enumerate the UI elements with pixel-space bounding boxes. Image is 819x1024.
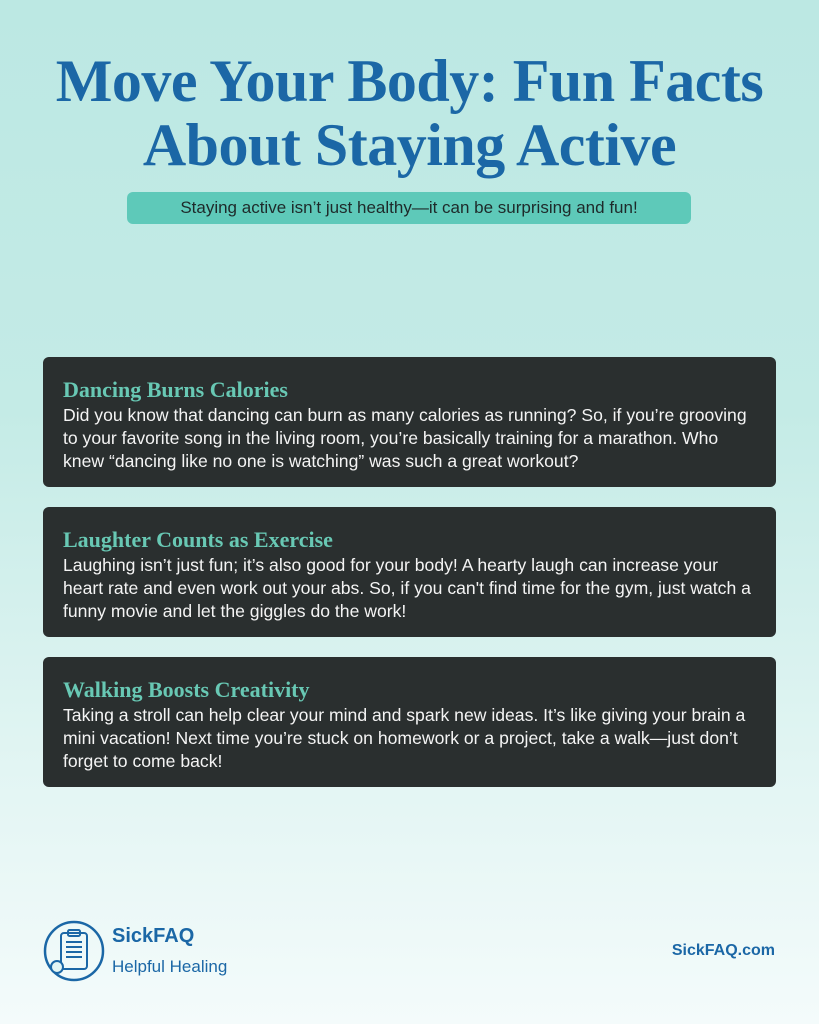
website: SickFAQ.com [672,942,775,959]
title: About Staying Active [143,112,676,178]
brand name: SickFAQ [112,925,194,947]
text: laughter [63,555,751,621]
text: walking [63,705,746,771]
text: laughter: Laughing isn’t just fun; it’s also good for your body! A hearty laugh can increase your [63,555,718,575]
title [56,48,763,178]
text: dancing: to your favorite song in the living room, you’re basically training for a marathon. Who [63,428,718,448]
text: laughter: heart rate and even work out your abs. So, if you can't find time for the gym, just watch a [63,578,751,598]
text: dancing [63,405,747,471]
title: Move Your Body: Fun Facts [56,48,763,114]
text: laughter: funny movie and let the giggles do the work! [63,601,406,621]
heading: dancing: Dancing Burns Calories [63,377,288,402]
panel: walking [43,657,776,787]
subtitle pill [127,192,691,224]
text: walking: mini vacation! Next time you’re stuck on homework or a project, take a walk—just don’t [63,728,738,748]
tagline: Helpful Healing [112,957,227,976]
logo [44,920,227,982]
icon: clipboard [44,920,104,982]
heading: laughter: Laughter Counts as Exercise [63,527,333,552]
text: dancing: knew “dancing like no one is watching” was such a great workout? [63,451,578,471]
subtitle pill: Staying active isn’t just healthy—it can be surprising and fun! [180,198,638,217]
panel: dancing [43,357,776,487]
text: walking: Taking a stroll can help clear your mind and spark new ideas. It’s like giving your brain a [63,705,745,725]
heading: walking: Walking Boosts Creativity [63,677,310,702]
text: dancing: Did you know that dancing can burn as many calories as running? So, if you’re grooving [63,405,747,425]
text: walking: forget to come back! [63,751,222,771]
panel: laughter [43,507,776,637]
